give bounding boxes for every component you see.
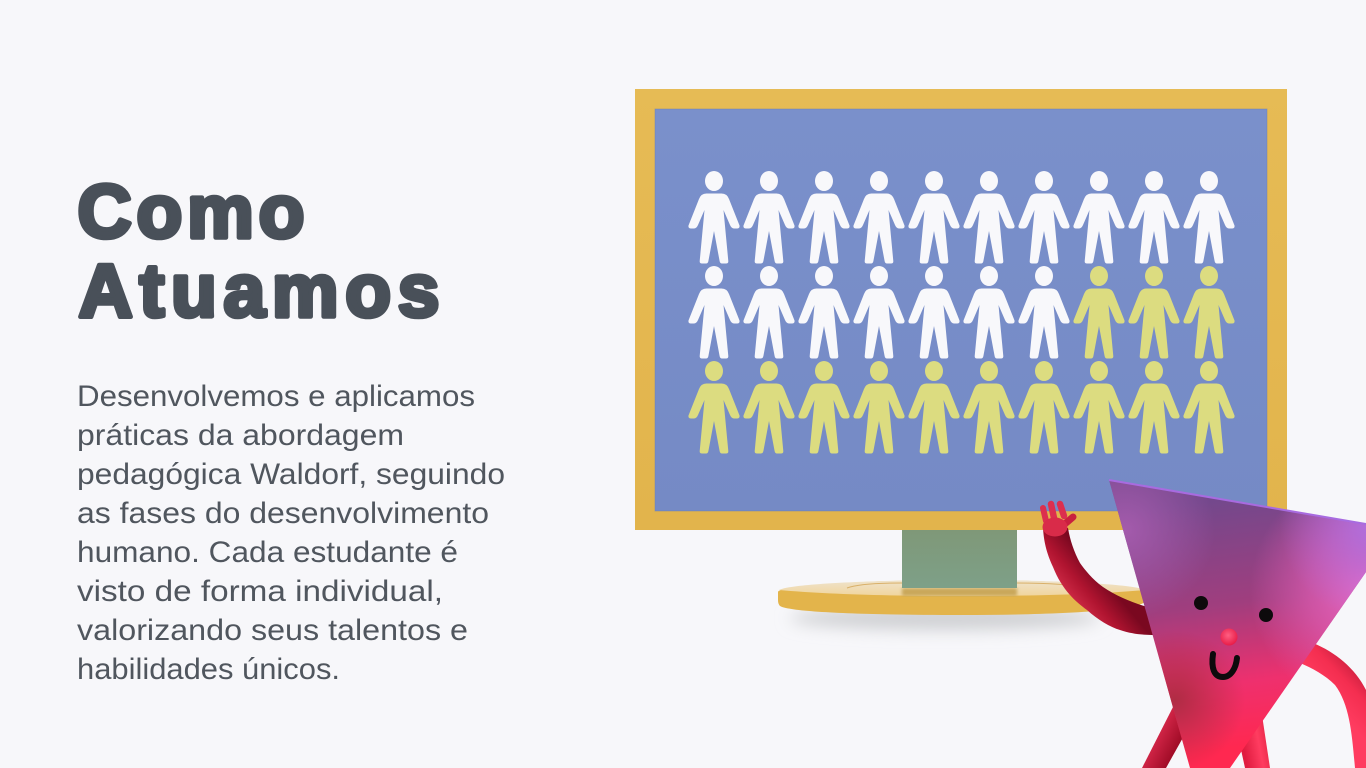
monitor bbox=[635, 89, 1287, 630]
left arm and hand bbox=[1042, 504, 1155, 635]
title: Como bbox=[78, 170, 304, 254]
monitor stand bbox=[902, 530, 1017, 588]
people row 1: white bbox=[688, 171, 1235, 264]
monitor frame bbox=[635, 89, 1287, 530]
character: cone mascot bbox=[1042, 480, 1366, 768]
monitor screen bbox=[655, 109, 1267, 511]
body text bbox=[77, 380, 505, 686]
body text: humano. Cada estudante é bbox=[77, 536, 458, 569]
body text: visto de forma individual, bbox=[77, 575, 443, 608]
body text: habilidades únicos. bbox=[77, 653, 340, 686]
body text: pedagógica Waldorf, seguindo bbox=[77, 458, 505, 491]
body text: valorizando seus talentos e bbox=[77, 614, 468, 647]
left leg bbox=[1142, 707, 1190, 768]
body text: as fases do desenvolvimento bbox=[77, 497, 489, 530]
people row 2: seven white bbox=[688, 266, 1070, 358]
base shadow bbox=[790, 606, 1100, 630]
people row 3: yellow bbox=[688, 361, 1235, 454]
mouth bbox=[1212, 654, 1237, 677]
title bbox=[78, 170, 440, 332]
cone body bbox=[1109, 480, 1366, 768]
people row 2: three yellow bbox=[1073, 266, 1235, 358]
body text: Desenvolvemos e aplicamos bbox=[77, 380, 475, 413]
body text: práticas da abordagem bbox=[77, 419, 404, 452]
title: Atuamos bbox=[78, 248, 440, 332]
eyes bbox=[1194, 596, 1273, 622]
nose bbox=[1220, 628, 1238, 646]
monitor base bbox=[778, 580, 1146, 615]
right leg bbox=[1240, 715, 1270, 768]
right arm bbox=[1300, 643, 1366, 768]
